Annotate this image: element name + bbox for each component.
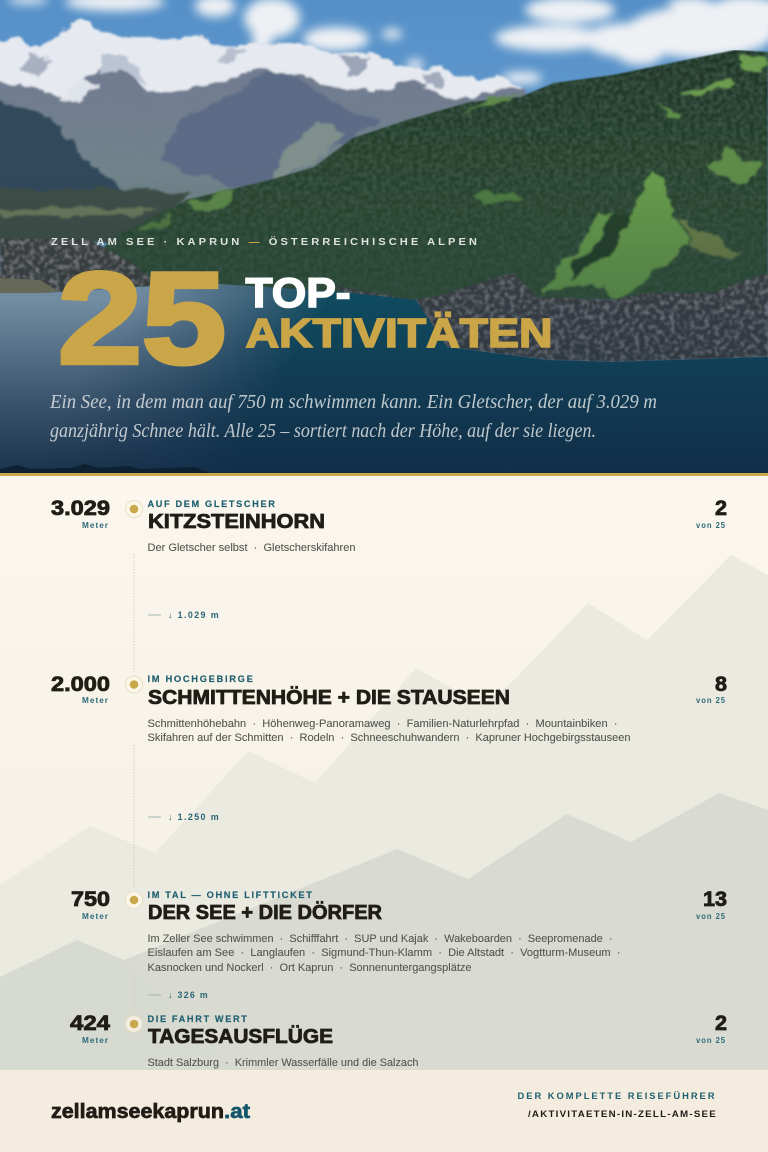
altitude 424: 424 xyxy=(70,1012,110,1035)
marker xyxy=(126,892,142,908)
count: 8 xyxy=(715,673,727,696)
count: 13 xyxy=(703,888,727,911)
hero title: AKTIVITÄTEN xyxy=(246,310,552,356)
activities: Schmittenhöhebahn · Höhenweg-Panoramaweg · Familien-Naturlehrpfad · Mountainbiken · xyxy=(148,718,618,730)
website name: zellamseekaprun xyxy=(51,1101,224,1123)
label: IM TAL — OHNE LIFTTICKET xyxy=(148,890,314,900)
activities: Eislaufen am See · Langlaufen · Sigmund-Thun-Klamm · Die Altstadt · Vogtturm-Museum · xyxy=(148,947,620,959)
activities: Stadt Salzburg · Krimmler Wasserfälle und die Salzach xyxy=(148,1057,418,1069)
heading: KITZSTEINHORN xyxy=(148,510,325,533)
section: Schmittenhöhe xyxy=(51,673,727,744)
unit: Meter xyxy=(82,1036,109,1045)
activities: Der Gletscher selbst · Gletscherskifahren xyxy=(148,542,356,554)
hero intro text: ganzjährig Schnee hält. Alle 25 – sortiert nach der Höhe, auf der sie liegen. xyxy=(50,420,596,442)
hero number 25: 25 xyxy=(58,245,226,391)
section: Der See und die Dörfer xyxy=(71,888,727,974)
gold divider xyxy=(0,473,768,476)
hero eyebrow: ZELL AM SEE · KAPRUN — ÖSTERREICHISCHE ALPEN xyxy=(51,235,480,248)
guide label: DER KOMPLETTE REISEFÜHRER xyxy=(518,1091,716,1102)
village and shore xyxy=(0,238,768,362)
timeline connector xyxy=(133,554,135,1013)
count label: von 25 xyxy=(696,912,726,921)
section: Tagesausflüge xyxy=(70,1012,727,1069)
elevation drop 1.029 m: ↓ 1.029 m xyxy=(168,610,220,620)
website name: .at xyxy=(224,1101,250,1123)
left dark mountain xyxy=(0,98,125,212)
count: 2 xyxy=(715,1012,727,1035)
hero title xyxy=(246,269,552,356)
hero title: TOP- xyxy=(246,269,350,316)
guide path: /AKTIVITAETEN-IN-ZELL-AM-SEE xyxy=(528,1109,717,1120)
forested hill xyxy=(100,50,768,300)
footer xyxy=(0,1070,768,1152)
hero intro text xyxy=(49,391,657,442)
label: AUF DEM GLETSCHER xyxy=(148,499,276,509)
count: 2 xyxy=(715,497,727,520)
darkening overlay on land xyxy=(0,170,768,370)
count label: von 25 xyxy=(696,521,726,530)
activities xyxy=(148,933,620,974)
hero photo: alpine lake landscape xyxy=(0,0,768,473)
panel background with mountain silhouettes xyxy=(0,476,768,1070)
unit: Meter xyxy=(82,696,109,705)
label: DIE FAHRT WERT xyxy=(148,1014,248,1024)
altitude 3.029: 3.029 xyxy=(51,497,110,520)
elevation drop 326 m: ↓ 326 m xyxy=(168,990,209,1000)
label: IM HOCHGEBIRGE xyxy=(148,674,254,684)
lake xyxy=(0,284,768,473)
count label: von 25 xyxy=(696,1036,726,1045)
marker xyxy=(126,1016,142,1032)
section: Kitzsteinhorn xyxy=(51,497,727,554)
marker xyxy=(126,500,142,518)
heading: DER SEE + DIE DÖRFER xyxy=(148,901,382,924)
heading: TAGESAUSFLÜGE xyxy=(148,1025,333,1048)
activities xyxy=(148,718,630,744)
unit: Meter xyxy=(82,521,109,530)
distant mountain massif xyxy=(0,18,525,215)
elevation drop 326 m xyxy=(148,990,209,1000)
activities: Kasnocken und Nockerl · Ort Kaprun · Sonnenuntergangsplätze xyxy=(148,962,472,974)
valley floor xyxy=(0,188,190,245)
activities: Im Zeller See schwimmen · Schifffahrt · SUP und Kajak · Wakeboarden · Seepromenade · xyxy=(148,933,612,945)
altitude 2.000: 2.000 xyxy=(51,673,110,696)
activities: Skifahren auf der Schmitten · Rodeln · Schneeschuhwandern · Kapruner Hochgebirgsstauseen xyxy=(148,732,630,744)
marker xyxy=(126,676,142,693)
heading: SCHMITTENHÖHE + DIE STAUSEEN xyxy=(148,686,510,709)
hero intro text: Ein See, in dem man auf 750 m schwimmen kann. Ein Gletscher, der auf 3.029 m xyxy=(49,391,657,413)
elevation drop 1.250 m: ↓ 1.250 m xyxy=(168,812,220,822)
count label: von 25 xyxy=(696,696,726,705)
altitude 750: 750 xyxy=(71,888,110,911)
unit: Meter xyxy=(82,912,109,921)
ski meadows xyxy=(540,170,690,300)
